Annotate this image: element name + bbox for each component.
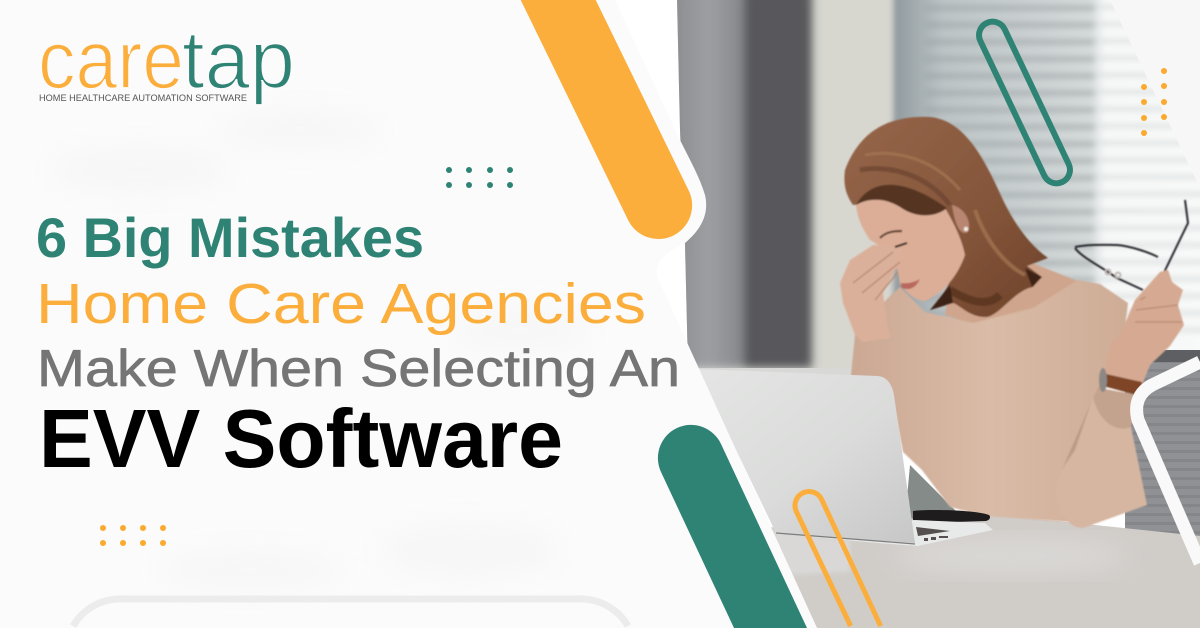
left-hand finger lines (853, 252, 900, 300)
title line 2: Home Care Agencies (36, 272, 646, 336)
laptop base (812, 520, 993, 546)
teal dot grid (446, 167, 513, 188)
desk surface (760, 514, 1200, 628)
raised forearm sleeve (1056, 397, 1147, 528)
chair behind the woman (690, 350, 1200, 537)
orange dot grid bottom left (100, 525, 166, 546)
orange outline capsule (795, 492, 881, 626)
laptop keys and ports (916, 527, 950, 541)
laptop (697, 369, 993, 546)
hair strands and shadows (856, 153, 1042, 310)
laptop lid (697, 369, 915, 543)
white top-right corner panel (1110, 0, 1200, 188)
hair back (844, 117, 1048, 317)
ribbed cuff (1093, 388, 1138, 428)
left hand at the nose (840, 244, 897, 342)
orange dot grid top right (1141, 68, 1167, 136)
right forearm and hand (1103, 270, 1184, 385)
laptop lid shadow edge (776, 533, 915, 544)
white left panel (0, 0, 817, 628)
woman (840, 117, 1188, 528)
paper texture (50, 112, 590, 588)
teal pill (658, 425, 807, 628)
title line 1: 6 Big Mistakes (36, 206, 424, 269)
title line 3: Make When Selecting An (37, 340, 680, 398)
fingers over the glasses (1145, 269, 1172, 298)
eyebrow, eye and lips (880, 231, 920, 289)
face (856, 200, 965, 301)
ear and earring (952, 205, 969, 233)
photo: stressed woman at a desk (670, 0, 1200, 628)
title line 4: EVV Software (39, 392, 563, 485)
sweater torso (851, 280, 1128, 522)
sweater shading (1064, 386, 1100, 465)
phone on desk (913, 510, 990, 523)
logo wordmark: care (38, 13, 184, 106)
orange pill (521, 0, 692, 239)
teal outline capsule (975, 17, 1074, 188)
grey outline at the bottom (73, 599, 628, 626)
grey curtain (670, 0, 812, 368)
window blinds background (670, 0, 1200, 380)
wristwatch (1099, 368, 1142, 396)
right-hand finger lines (1135, 296, 1182, 323)
logo wordmark: tap (182, 13, 295, 106)
logo tagline: HOME HEALTHCARE AUTOMATION SOFTWARE (39, 93, 247, 104)
white outlined shape bottom right (1137, 362, 1200, 563)
glasses (1075, 200, 1188, 290)
logo: caretap (38, 13, 295, 106)
neck (944, 263, 1077, 324)
title (36, 206, 680, 485)
